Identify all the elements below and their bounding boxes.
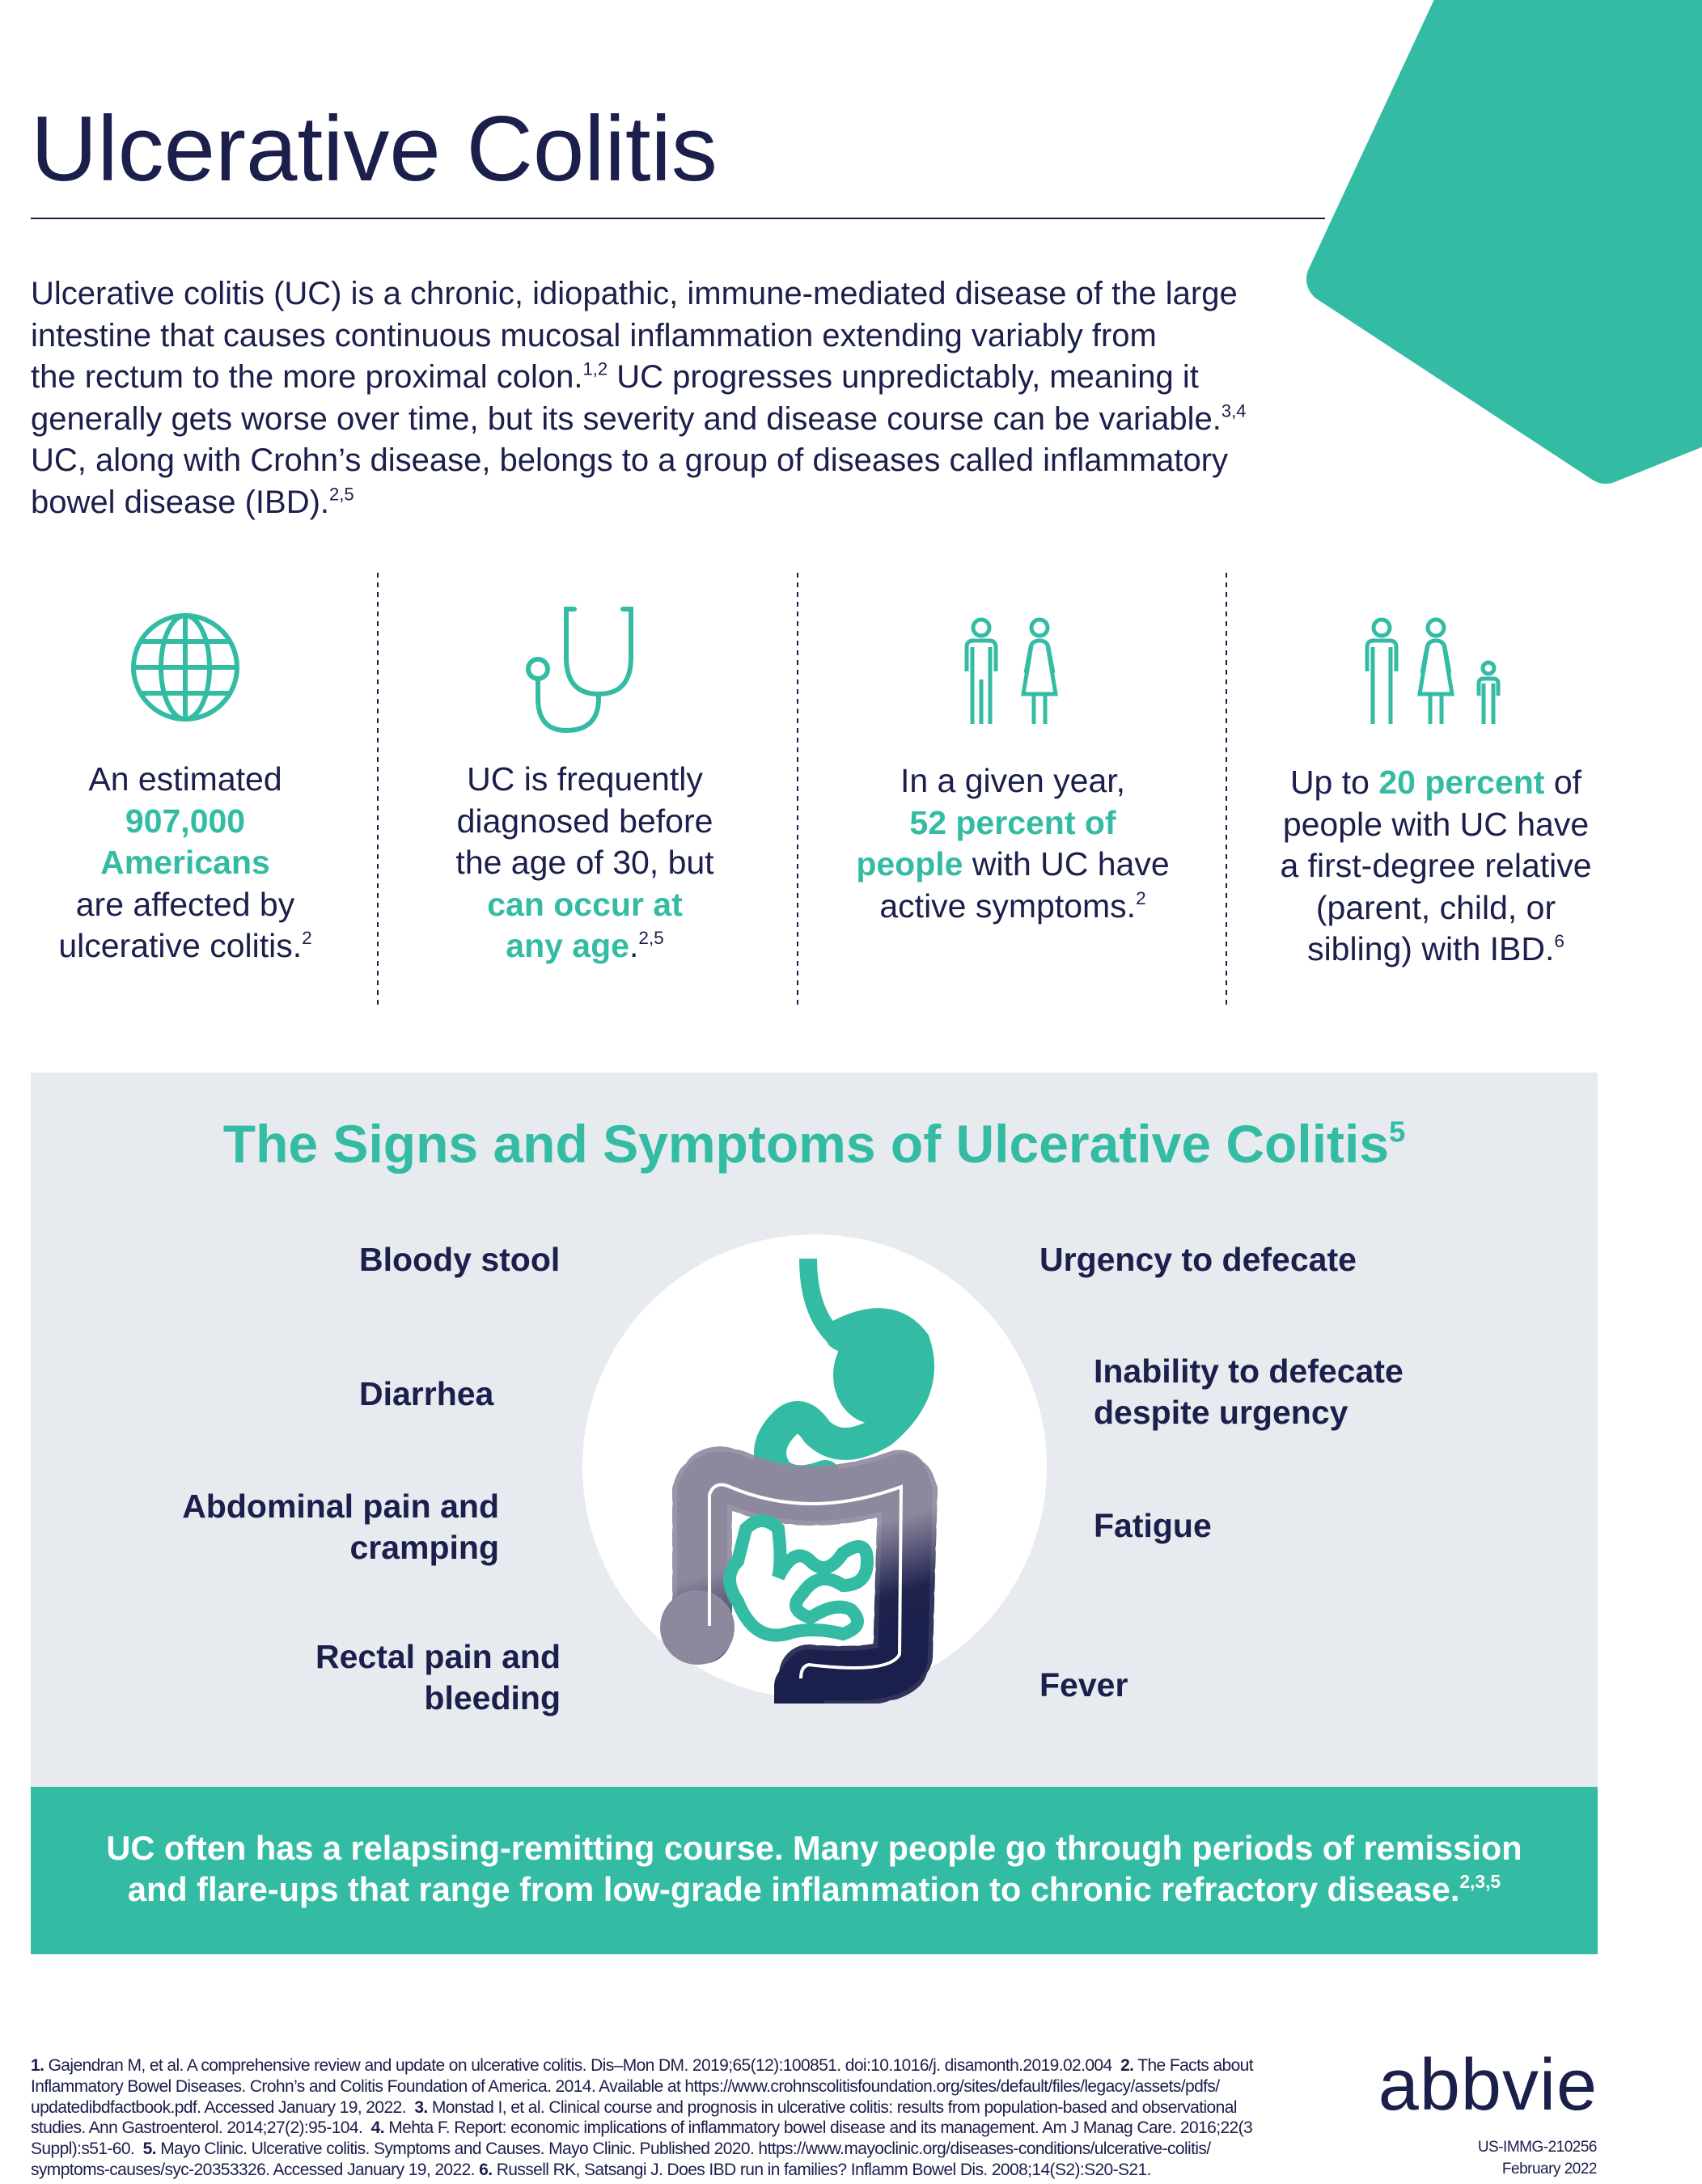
stat 3 text: active symptoms.2 [879,887,1146,924]
references [31,2056,1254,2179]
job code: US-IMMG-210256 [1478,2139,1597,2156]
intro paragraph: UC, along with Crohn’s disease, belongs to a group of diseases called inflammatory [31,442,1228,478]
dividers [377,573,1227,1005]
stat 1 text: are affected by [76,885,294,922]
icon: family [1365,618,1500,724]
stat 2 text: any age.2,5 [506,927,664,964]
heading: The Signs and Symptoms of Ulcerative Colitis5 [223,1114,1405,1174]
panel: signs and symptoms: Diarrhea [359,1375,493,1412]
title: Ulcerative Colitis [31,98,718,201]
banner: relapsing-remitting: and flare-ups that range from low-grade inflammation to chronic refractory disease.2,3,5 [128,1870,1501,1908]
panel: signs and symptoms: Inability to defecate [1094,1352,1404,1390]
stat 4 text [1280,764,1592,967]
stat 2 text: UC is frequently [467,760,703,798]
stat 4 text: people with UC have [1283,806,1589,843]
icon: globe [131,613,239,722]
stat 3 text: In a given year, [900,762,1125,799]
panel: signs and symptoms: Fatigue [1094,1507,1212,1544]
stat 2 text: diagnosed before [457,802,713,840]
job code [1478,2139,1597,2178]
stat 2 text [455,760,714,964]
references: symptoms-causes/syc-20353326. Accessed January 19, 2022. 6. Russell RK, Satsangi J. Does IBD run in families? Inflamm Bowel Dis. 2008;14(S2):S20-S21. [31,2161,1151,2179]
stat 4 text: Up to 20 percent of [1290,764,1581,801]
intro paragraph [31,276,1246,519]
illustration: digestive tract [582,1234,1047,1704]
references: Inflammatory Bowel Diseases. Crohn’s and Colitis Foundation of America. 2014. Available at https://www.crohnscolitisfoundation.org/sites/default/files/legacy/assets/pdfs/ [31,2077,1220,2096]
stat 2 text: can occur at [487,885,683,922]
stat 3 text: people with UC have [856,845,1170,882]
panel: signs and symptoms: Abdominal pain and [182,1488,499,1525]
references: studies. Ann Gastroenterol. 2014;27(2):95-104. 4. Mehta F. Report: economic implications of inflammatory bowel disease and its management. Am J Manag Care. 2016;22(3 [31,2118,1252,2137]
references: Suppl):s51-60. 5. Mayo Clinic. Ulcerative colitis. Symptoms and Causes. Mayo Clinic. Published 2020. https://www.mayoclinic.org/diseases-conditions/ulcerative-colitis/ [31,2140,1211,2158]
stat 1 text: An estimated [88,760,282,798]
banner: relapsing-remitting [31,1787,1598,1954]
intro paragraph: the rectum to the more proximal colon.1,2 UC progresses unpredictably, meaning it [31,359,1199,395]
stat 3 text: 52 percent of [909,804,1116,841]
intro paragraph: Ulcerative colitis (UC) is a chronic, idiopathic, immune-mediated disease of the large [31,276,1238,311]
decorative teal shape [1306,0,1702,484]
panel: signs and symptoms: cramping [349,1529,499,1566]
symptom labels right: Urgency to defecate [1039,1241,1357,1278]
logo: abbvie: abbvie [1378,2045,1598,2126]
panel: signs and symptoms: despite urgency [1094,1394,1348,1431]
banner: relapsing-remitting: UC often has a relapsing-remitting course. Many people go through periods of remission [106,1829,1522,1867]
stat 4 text: sibling) with IBD.6 [1307,930,1564,967]
job code: February 2022 [1502,2161,1597,2178]
stat 4 text: a first-degree relative [1280,847,1592,884]
icon: stethoscope [526,607,633,733]
stat 2 text: the age of 30, but [455,844,714,881]
stat 1 text: 907,000 [125,802,245,840]
symptom labels left: Bloody stool [359,1241,560,1278]
intro paragraph: intestine that causes continuous mucosal inflammation extending variably from [31,317,1157,353]
references: updatedibdfactbook.pdf. Accessed January 19, 2022. 3. Monstad I, et al. Clinical course and prognosis in ulcerative colitis: results from population-based and observational [31,2098,1237,2117]
references: 1. Gajendran M, et al. A comprehensive review and update on ulcerative colitis. Dis–Mon DM. 2019;65(12):100851. doi:10.1016/j. disamonth.2019.02.004 2. The Facts about [31,2056,1253,2075]
icon: man and woman [964,618,1058,724]
stat 1 text [58,760,312,964]
intro paragraph: generally gets worse over time, but its severity and disease course can be variable.3,4 [31,400,1246,437]
stat 1 [131,613,239,722]
stat 1 text: ulcerative colitis.2 [58,927,312,964]
stat 3 text [856,762,1170,924]
panel: signs and symptoms: Fever [1039,1666,1128,1704]
panel: signs and symptoms: bleeding [424,1679,561,1716]
stat 1 text: Americans [100,844,270,881]
panel: signs and symptoms [31,1073,1598,1788]
stat 4 text: (parent, child, or [1316,888,1556,925]
panel: signs and symptoms: Rectal pain and [315,1638,561,1675]
intro paragraph: bowel disease (IBD).2,5 [31,484,354,519]
